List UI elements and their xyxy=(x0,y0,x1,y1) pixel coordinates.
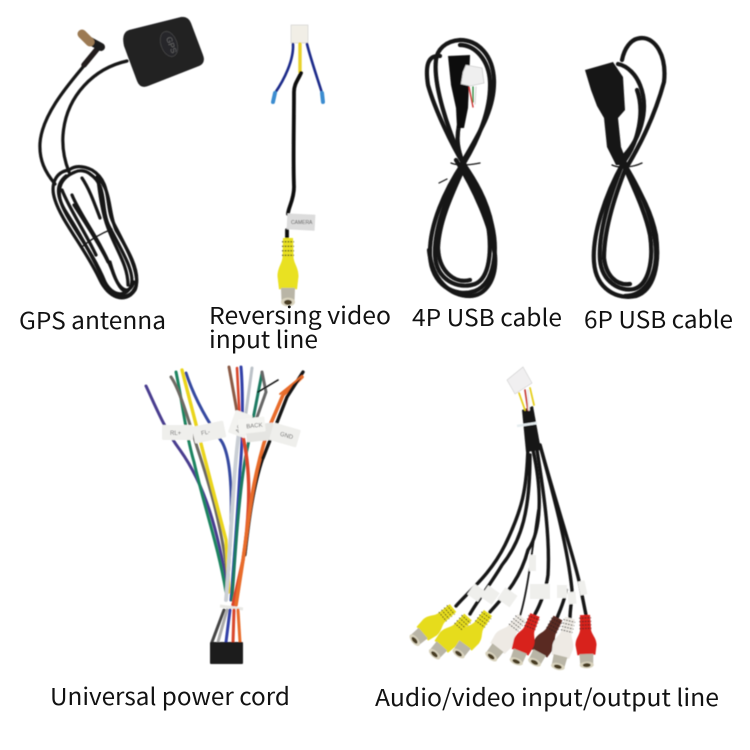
white 4P plug xyxy=(461,65,484,86)
black connector xyxy=(210,642,243,664)
GPS receiver block: GPS xyxy=(164,36,178,55)
cable loops xyxy=(594,38,664,297)
RCA plugs xyxy=(405,600,597,672)
cable loops xyxy=(427,40,495,296)
USB socket xyxy=(585,62,628,165)
cable labels xyxy=(467,555,587,607)
camera label: CAMERA xyxy=(291,220,313,226)
universal power cord xyxy=(146,367,303,664)
USB socket xyxy=(448,55,470,128)
caption: reversing video input line xyxy=(209,297,391,355)
GPS receiver block xyxy=(123,17,204,87)
camera label xyxy=(287,213,315,231)
cable tie xyxy=(517,423,537,426)
caption: GPS antenna: GPS antenna xyxy=(19,302,166,336)
wire labels xyxy=(162,410,301,448)
GPS antenna product xyxy=(40,17,204,298)
caption: reversing video input line: Reversing video xyxy=(209,297,391,331)
yellow RCA plug xyxy=(278,238,298,306)
cable trunk xyxy=(522,406,541,452)
wire labels: BACK xyxy=(246,423,263,430)
audio/video input/output line xyxy=(405,367,597,672)
wires into plug xyxy=(212,610,240,642)
white multi-pin plug xyxy=(507,367,532,394)
coloured wires xyxy=(146,367,303,605)
wires xyxy=(273,44,323,240)
black cables xyxy=(456,445,586,618)
caption: universal power cord: Universal power cord xyxy=(50,678,290,712)
wire labels: FL- xyxy=(201,429,211,437)
GPS right-angle connector xyxy=(82,34,101,65)
4P wires xyxy=(469,87,476,107)
GPS antenna coiled cable xyxy=(40,61,137,298)
caption: 6P USB cable: 6P USB cable xyxy=(584,301,733,335)
wire labels: RL+ xyxy=(170,431,182,437)
cable tie xyxy=(220,606,243,609)
6P USB cable product xyxy=(585,38,664,297)
4P USB cable product xyxy=(427,40,495,296)
wire labels: GND xyxy=(279,432,294,441)
caption: reversing video input line: input line xyxy=(209,321,318,355)
reversing video input line xyxy=(273,25,323,306)
caption: 4P USB cable: 4P USB cable xyxy=(412,299,562,333)
wire labels: ACC xyxy=(235,419,246,434)
coloured wires xyxy=(519,388,534,410)
white plug xyxy=(291,25,308,43)
caption: audio/video input/output line: Audio/video input/output line xyxy=(375,679,719,713)
